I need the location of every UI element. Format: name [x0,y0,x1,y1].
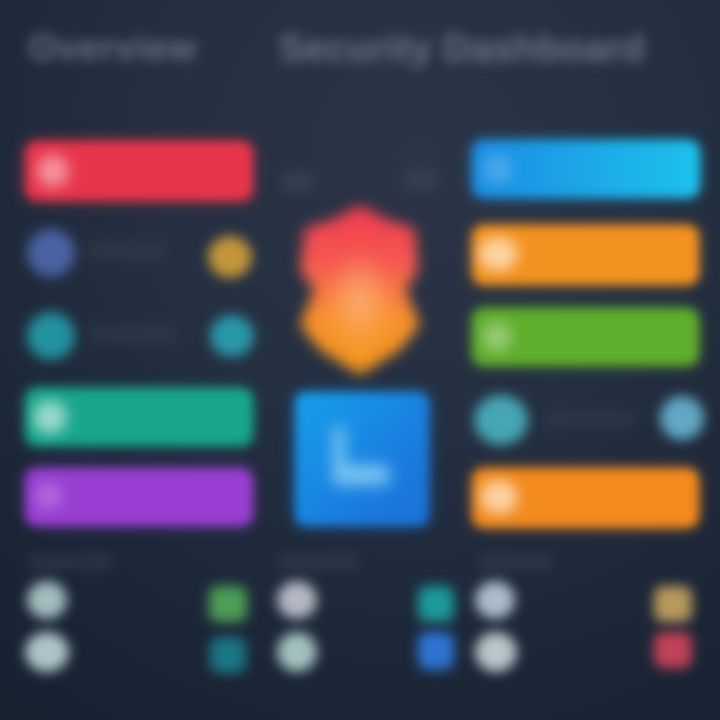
label [278,554,358,570]
marker 1 [27,581,67,619]
swatch blue [418,632,454,670]
panel: left column [14,130,264,536]
label [478,554,553,570]
green bar [472,308,699,366]
icon: blue square tile [295,392,429,526]
marker 1 [475,581,515,619]
title: right heading: Security Dashboard [279,28,645,70]
icon: shield [290,196,429,384]
purple bar [25,468,253,526]
icon: small left marker [282,172,314,192]
row: teal icon [466,387,712,453]
green bar [25,388,253,446]
marker 2 [475,632,517,672]
swatch teal [210,637,246,673]
label [28,554,113,570]
glyph inside tile [323,420,398,496]
icon: small right marker [405,170,437,190]
swatch tan [654,586,692,622]
red bar [25,141,253,201]
orange bar [472,225,699,285]
marker 2 [277,632,317,672]
marker 2 [25,632,69,672]
orange bar lower [472,468,699,528]
swatch red [654,632,692,668]
panel: bottom list middle [268,556,464,680]
panel: bottom list left [16,555,256,680]
swatch teal [418,586,454,622]
row: blue icon [20,222,260,286]
panel: right column [462,130,712,538]
blue bar [472,140,700,198]
title: left heading: Overview [29,27,197,68]
marker 1 [277,581,317,619]
panel: bottom list right [466,556,702,680]
row: teal icon [20,304,262,368]
swatch green [209,586,247,622]
